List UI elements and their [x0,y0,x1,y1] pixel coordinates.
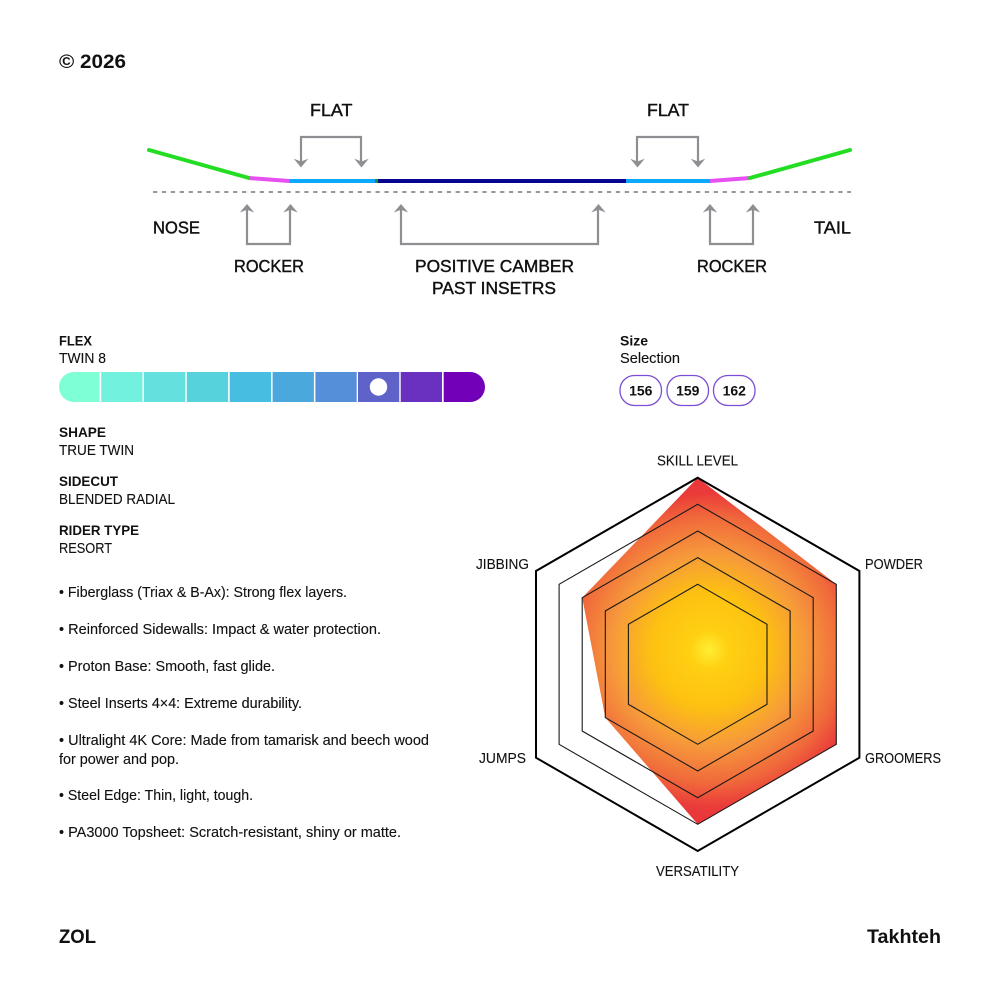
spec: rider type: RIDER TYPE [59,522,139,538]
spec: sidecut: BLENDED RADIAL [59,492,175,508]
radar label: powder: POWDER [865,557,923,573]
radar label: jumps: JUMPS [479,751,526,767]
label: positive camber: PAST INSETRS [432,278,556,298]
spec: rider type: RESORT [59,541,112,557]
radar chart [476,454,941,880]
size heading: Size [620,332,648,348]
size 159: 159 [676,382,700,398]
arrow: right rocker [703,204,760,244]
feature list: • Proton Base: Smooth, fast glide. [59,659,275,675]
radar label: groomers: GROOMERS [865,751,941,767]
label: rocker left: ROCKER [234,256,304,276]
arrow: left flat [294,137,369,168]
footer brand: ZOL [59,927,96,948]
radar grid [536,478,859,851]
label: tail: TAIL [814,218,851,238]
spec: shape: SHAPE [59,424,106,440]
flex heading [59,332,106,367]
flex heading: FLEX [59,332,93,348]
radar label: skill level: SKILL LEVEL [657,454,738,470]
flex marker [370,378,387,396]
feature list: • PA3000 Topsheet: Scratch-resistant, shiny or matte. [59,825,401,841]
radar label: jibbing: JIBBING [476,557,529,573]
feature list: • Fiberglass (Triax & B-Ax): Strong flex layers. [59,585,347,601]
radar data polygon [582,478,836,824]
spec: rider type [59,522,139,557]
radar label: versatility: VERSATILITY [656,864,739,880]
size 162: 162 [723,382,746,398]
size heading [620,332,680,367]
copyright heading: © 2026 [59,52,126,73]
label: nose: NOSE [153,218,200,238]
spec: sidecut [59,473,175,508]
arrow: left rocker [240,204,298,244]
spec: shape [59,424,134,459]
label: flat left: FLAT [310,100,353,120]
spec: shape: TRUE TWIN [59,443,134,459]
spec: sidecut: SIDECUT [59,473,118,489]
feature list: for power and pop. [59,752,179,768]
label: positive camber [415,256,574,298]
label: rocker right: ROCKER [697,256,767,276]
camber profile diagram [149,100,851,298]
feature list: • Steel Edge: Thin, light, tough. [59,788,253,804]
arrow: positive camber [394,204,606,244]
feature list: • Steel Inserts 4×4: Extreme durability. [59,696,302,712]
label: positive camber: POSITIVE CAMBER [415,256,574,276]
footer model: Takhteh [867,927,941,948]
label: flat right: FLAT [647,100,689,120]
size 156: 156 [629,382,653,398]
size options [620,376,755,406]
arrow: right flat [630,137,705,168]
feature list: • Ultralight 4K Core: Made from tamarisk and beech wood [59,733,429,749]
feature list: • Reinforced Sidewalls: Impact & water protection. [59,622,381,638]
flex scale bar [59,372,485,402]
flex heading: TWIN 8 [59,351,106,367]
feature list [59,585,429,841]
size heading: Selection [620,351,680,367]
board profile line [149,150,850,181]
